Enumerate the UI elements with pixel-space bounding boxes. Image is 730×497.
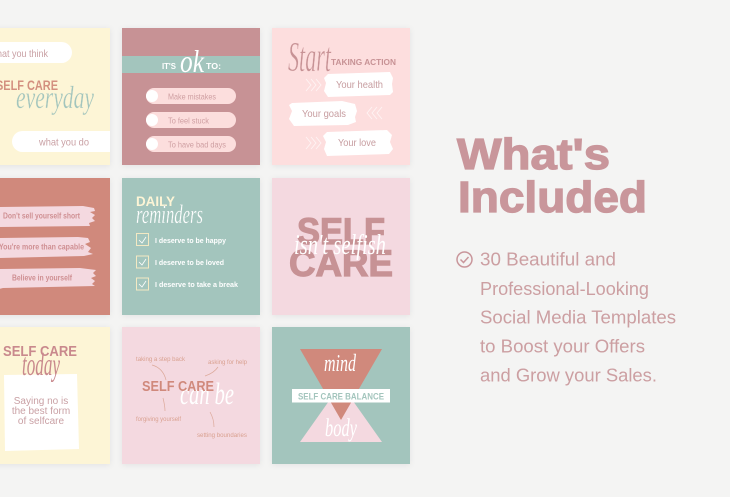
panel: self care can be card: taking a step back [136, 356, 186, 363]
text block: feature description: 30 Beautiful and [480, 248, 616, 270]
text block: feature description: Professional-Looking [480, 278, 649, 299]
panel: self care today card: Saying no is [14, 396, 68, 407]
panel: start taking action card: Your health [336, 79, 383, 91]
panel: self care isn't selfish card: isn't selfish [294, 230, 386, 261]
panel: start taking action card: Your love [338, 137, 376, 149]
panel: self care balance card: body [325, 415, 358, 442]
icon: check circle [457, 252, 472, 267]
panel: self care can be card: setting boundaries [197, 432, 248, 439]
panel: daily reminders card: I deserve to be loved [155, 258, 224, 267]
text block: feature description: Social Media Templates [480, 306, 676, 328]
panel: what you think card: what you do [38, 136, 89, 148]
heading: What's Included [457, 130, 647, 222]
panel: start taking action card: TAKING ACTION [331, 57, 396, 67]
panel: daily reminders card: I deserve to be happy [155, 236, 227, 245]
panel: daily reminders card [122, 178, 260, 315]
panel: start taking action card: Start [288, 35, 332, 81]
panel: self care today card: of selfcare [18, 416, 65, 427]
panel: self care can be card: SELF CARE [142, 379, 214, 395]
panel: what you think card: everyday [16, 79, 95, 115]
panel: self care isn't selfish card: SELF [297, 211, 385, 252]
text block: feature description: and Grow your Sales. [480, 364, 657, 386]
panel: don't sell yourself short card: Believe in yourself [12, 274, 72, 282]
panel: self care can be card [122, 327, 260, 464]
panel: self care can be card: asking for help [208, 359, 247, 366]
panel: daily reminders card: I deserve to take a break [155, 280, 239, 289]
panel: self care balance card [272, 327, 410, 464]
panel: daily reminders card: DAILY [136, 193, 176, 209]
panel: it's ok to card: ok [180, 43, 205, 79]
text block: feature description: to Boost your Offers [480, 336, 645, 356]
text block: feature description [480, 248, 676, 386]
panel: self care balance card: mind [324, 351, 357, 377]
panel: don't sell yourself short card [0, 178, 110, 315]
panel: self care balance card: SELF CARE BALANCE [298, 392, 384, 402]
panel: self care isn't selfish card: CARE [289, 243, 393, 284]
heading: What's Included: What's [457, 130, 610, 179]
panel: self care can be card: can be [180, 376, 234, 411]
panel: start taking action card [272, 28, 410, 165]
heading: What's Included: Included [458, 173, 647, 222]
panel: self care can be card: forgiving yourself [136, 416, 181, 423]
panel: self care today card: SELF CARE [3, 344, 77, 360]
panel: self care today card: the best form [12, 406, 70, 417]
panel: self care isn't selfish card [272, 178, 410, 315]
panel: what you think card [0, 28, 122, 165]
panel: self care today card: today [22, 346, 60, 382]
panel: it's ok to card: Make mistakes [168, 92, 216, 102]
panel: it's ok to card: TO: [206, 61, 221, 71]
panel: daily reminders card: reminders [136, 200, 203, 229]
panel: self care today card [0, 327, 110, 464]
panel: it's ok to card [122, 28, 260, 165]
panel: don't sell yourself short card: Don't sell yourself short [3, 212, 80, 220]
panel: start taking action card: Your goals [302, 108, 346, 120]
panel: don't sell yourself short card: You're more than capable [0, 242, 84, 252]
panel: it's ok to card: To feel stuck [168, 116, 210, 126]
panel: it's ok to card: IT'S [162, 61, 176, 71]
panel: it's ok to card: To have bad days [168, 140, 226, 150]
